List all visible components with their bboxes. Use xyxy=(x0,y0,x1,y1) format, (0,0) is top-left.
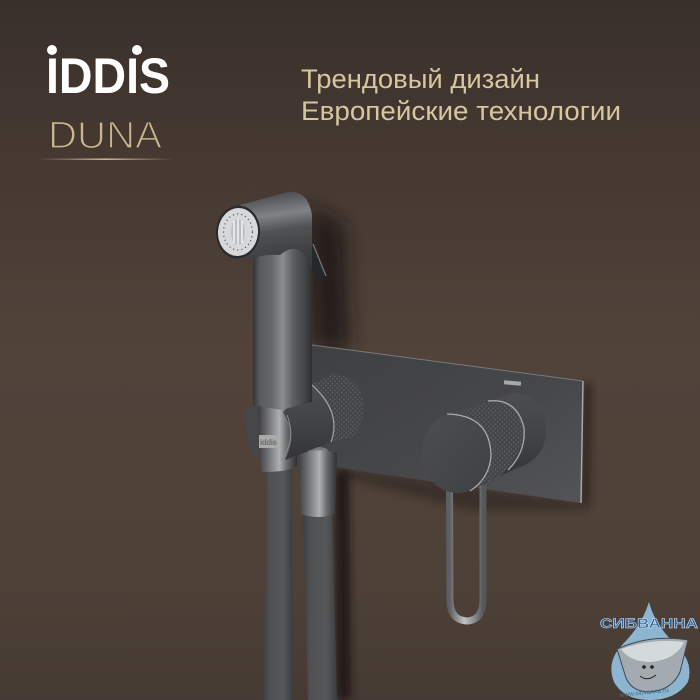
logo: IDDIS: IDDIS xyxy=(46,48,170,104)
mounting plate xyxy=(312,345,583,503)
hose: right, from wall connector xyxy=(303,515,337,700)
heading: slogans xyxy=(301,64,621,126)
water drop xyxy=(611,602,690,700)
collar label: iddis xyxy=(260,438,278,447)
series name: DUNA: DUNA xyxy=(48,115,163,157)
heading: slogans: Европейские технологии xyxy=(301,96,621,126)
knurled grip xyxy=(447,401,523,491)
sprayer head xyxy=(240,192,312,268)
lever handle loop xyxy=(450,485,483,621)
plate logo mark xyxy=(504,380,521,386)
nozzle face xyxy=(216,206,260,258)
knurled holder base xyxy=(312,374,364,442)
knob base cylinder xyxy=(488,393,546,480)
website: www.sibvanna.ru xyxy=(618,687,669,699)
sprayer handle xyxy=(253,235,312,410)
hose: left, under handle xyxy=(263,468,293,700)
brand name: СИБВАННА xyxy=(600,615,698,631)
watermark: Sibvanna logo xyxy=(600,602,698,700)
bathtub face xyxy=(640,665,656,679)
trigger xyxy=(312,243,326,279)
bathtub xyxy=(617,638,688,692)
metal collar xyxy=(258,405,297,472)
wall connector xyxy=(298,447,337,517)
knob front face xyxy=(422,413,492,493)
hand sprayer xyxy=(214,192,326,410)
gold divider under series name xyxy=(38,158,174,160)
holder cylinder xyxy=(283,385,333,460)
heading: slogans: Трендовый дизайн xyxy=(301,64,540,94)
mixer knob xyxy=(422,393,546,493)
wall shadows cast by the fixture xyxy=(308,205,592,700)
handle holder on wall xyxy=(245,374,364,472)
nozzle rim xyxy=(214,204,262,260)
bracket xyxy=(245,407,258,457)
